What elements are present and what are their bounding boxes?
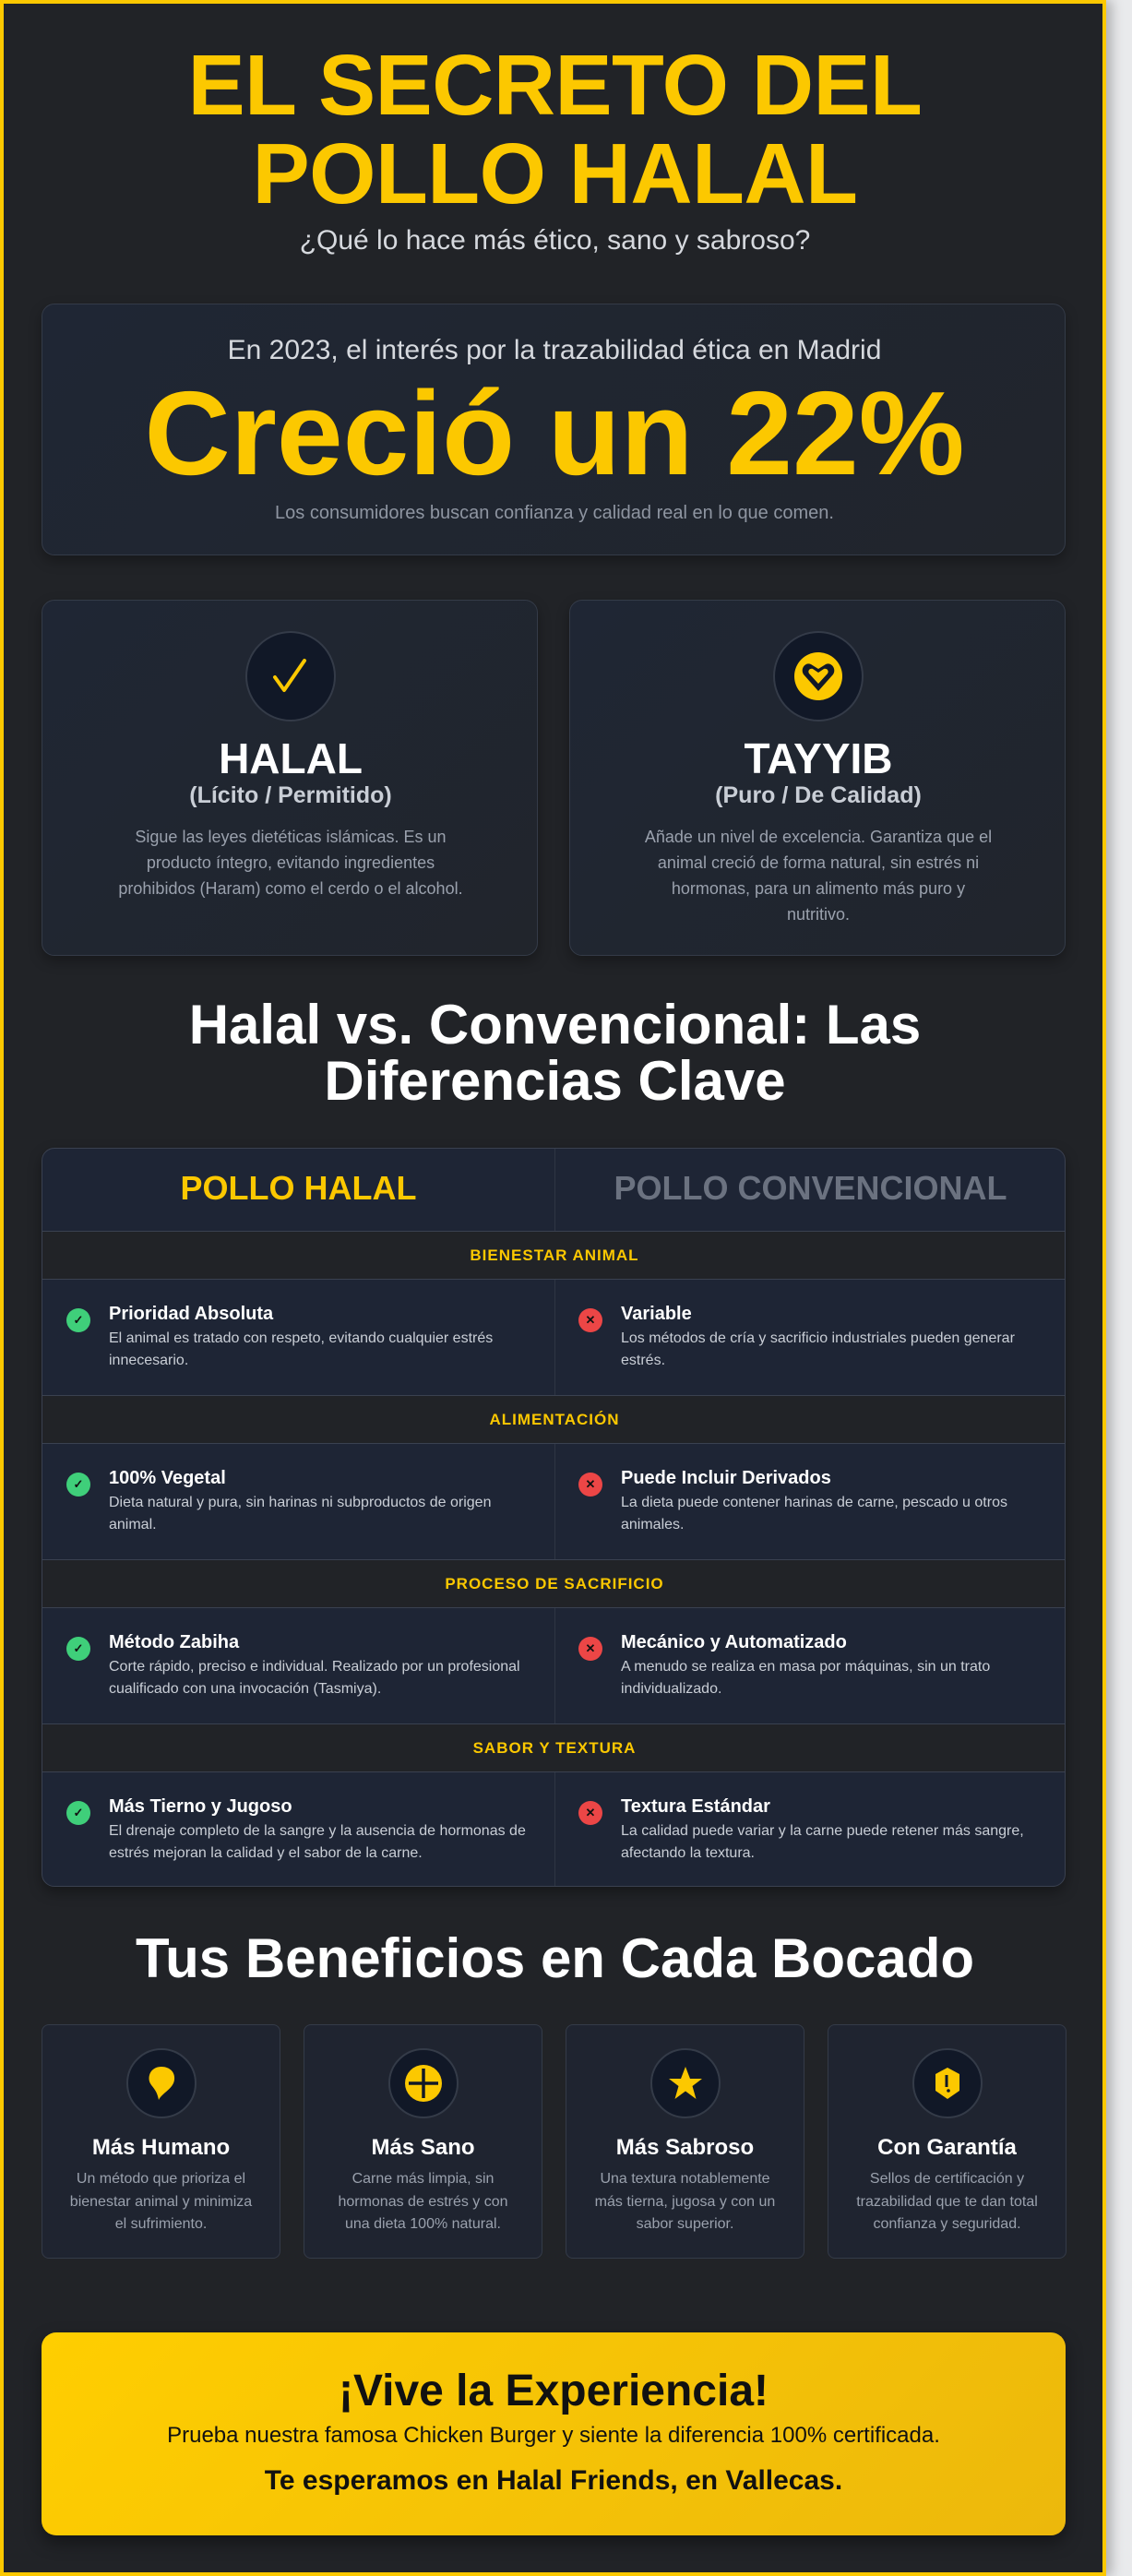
panel: halal	[42, 600, 538, 956]
row: bienestar convencional: Los métodos de cría y sacrificio industriales pueden generar estrés.	[621, 1330, 1015, 1368]
row: alimentacion halal: ✓	[74, 1477, 83, 1491]
row: sacrificio halal: Método Zabiha	[109, 1632, 239, 1652]
stat number: Creció un 22%	[145, 367, 964, 500]
row label: sacrificio: PROCESO DE SACRIFICIO	[445, 1575, 664, 1592]
row: sacrificio convencional: Mecánico y Automatizado	[621, 1632, 847, 1652]
CTA text: Prueba nuestra famosa Chicken Burger y siente la diferencia 100% certificada.	[167, 2423, 940, 2448]
panel: tayyib	[569, 600, 1066, 956]
CTA location: Te esperamos en Halal Friends, en Vallecas.	[265, 2465, 842, 2496]
icon: plus	[388, 2048, 459, 2118]
row: sabor convencional: ✕	[586, 1806, 595, 1819]
row: bienestar convencional	[578, 1304, 1015, 1368]
benefit: sabroso	[566, 2024, 804, 2259]
row: alimentacion convencional: Puede Incluir Derivados	[621, 1468, 831, 1488]
row: sabor halal: Más Tierno y Jugoso	[109, 1796, 292, 1817]
row: sacrificio halal: Corte rápido, preciso e individual. Realizado por un profesional cualificado con una invocación (Tasmiya).	[109, 1659, 520, 1697]
callout: CTA	[42, 2332, 1066, 2535]
heading: benefits: Tus Beneficios en Cada Bocado	[136, 1927, 974, 1989]
row: sabor halal: ✓	[74, 1806, 83, 1819]
benefit: garantia: Sellos de certificación y trazabilidad que te dan total confianza y seguridad.	[856, 2171, 1038, 2232]
icon: heart badge	[773, 631, 864, 722]
panel: stat callout	[42, 304, 1066, 555]
description: Sigue las leyes dietéticas islámicas. Es un producto íntegro, evitando ingredientes prohibidos (Haram) como el cerdo o el alcohol.	[118, 828, 463, 898]
row: sabor convencional: Textura Estándar	[621, 1796, 770, 1817]
row label: bienestar	[42, 1231, 1066, 1280]
row: alimentacion convencional	[578, 1468, 1007, 1532]
subheading: (Puro / De Calidad)	[715, 782, 922, 808]
row label: sacrificio	[42, 1559, 1066, 1608]
benefit: garantia	[828, 2024, 1066, 2259]
row: bienestar halal	[66, 1304, 493, 1368]
benefit: sano	[304, 2024, 542, 2259]
icon: drop	[126, 2048, 197, 2118]
row: bienestar halal: ✓	[74, 1313, 83, 1327]
comparison table	[42, 1148, 1066, 1887]
row label: alimentacion	[42, 1395, 1066, 1444]
row: alimentacion convencional: ✕	[586, 1477, 595, 1491]
row: bienestar halal: Prioridad Absoluta	[109, 1304, 273, 1324]
title: POLLO HALAL	[253, 125, 857, 221]
heading: halal: HALAL	[219, 734, 363, 782]
row: sacrificio convencional: A menudo se realiza en masa por máquinas, sin un trato individualizado.	[621, 1659, 990, 1697]
row: sabor halal	[66, 1796, 526, 1861]
subtitle: ¿Qué lo hace más ético, sano y sabroso?	[300, 225, 810, 256]
benefit: sabroso: Más Sabroso	[616, 2135, 754, 2160]
row: bienestar convencional: ✕	[586, 1313, 595, 1327]
row label: sabor: SABOR Y TEXTURA	[473, 1739, 636, 1757]
icon: check	[245, 631, 336, 722]
benefit: sabroso: Una textura notablemente más tierna, jugosa y con un sabor superior.	[595, 2171, 775, 2232]
heading: comparison	[189, 994, 921, 1112]
row label: alimentacion: ALIMENTACIÓN	[489, 1411, 620, 1428]
row: alimentacion halal: Dieta natural y pura, sin harinas ni subproductos de origen animal.	[109, 1495, 491, 1532]
benefit: sano: Carne más limpia, sin hormonas de estrés y con una dieta 100% natural.	[338, 2171, 508, 2232]
benefit: sano: Más Sano	[371, 2135, 475, 2160]
subheading: (Lícito / Permitido)	[189, 782, 392, 808]
row: sabor convencional	[578, 1796, 1024, 1861]
heading: tayyib: TAYYIB	[744, 734, 893, 782]
row: sacrificio convencional: ✕	[586, 1641, 595, 1655]
heading: comparison: Halal vs. Convencional: Las	[189, 994, 921, 1055]
row: bienestar convencional: Variable	[621, 1304, 692, 1324]
row: alimentacion halal	[66, 1468, 491, 1532]
row: alimentacion convencional: La dieta puede contener harinas de carne, pescado u otros animales.	[621, 1495, 1007, 1532]
description: Añade un nivel de excelencia. Garantiza que el animal creció de forma natural, sin estrés ni hormonas, para un alimento más puro y nutritivo.	[645, 828, 992, 924]
heading: comparison: Diferencias Clave	[324, 1050, 786, 1112]
title	[188, 37, 922, 221]
benefit: humano	[42, 2024, 280, 2259]
row: sacrificio halal	[66, 1632, 520, 1697]
row: sabor halal: El drenaje completo de la sangre y la ausencia de hormonas de estrés mejoran la calidad y el sabor de la carne.	[109, 1823, 526, 1861]
row: sabor convencional: La calidad puede variar y la carne puede retener más sangre, afectando la textura.	[621, 1823, 1024, 1861]
row: alimentacion halal: 100% Vegetal	[109, 1468, 226, 1488]
benefit: garantia: Con Garantía	[877, 2135, 1017, 2160]
row: bienestar halal: El animal es tratado con respeto, evitando cualquier estrés innecesario.	[109, 1330, 493, 1368]
benefit: humano: Un método que prioriza el bienestar animal y minimiza el sufrimiento.	[70, 2171, 252, 2232]
column header: convencional: POLLO CONVENCIONAL	[614, 1169, 1007, 1207]
benefit: humano: Más Humano	[92, 2135, 230, 2160]
icon: shield	[912, 2048, 983, 2118]
row label: bienestar: BIENESTAR ANIMAL	[470, 1246, 639, 1264]
row: sacrificio convencional	[578, 1632, 990, 1697]
icon: star	[650, 2048, 721, 2118]
row: sacrificio halal: ✓	[74, 1641, 83, 1655]
title: EL SECRETO DEL	[188, 37, 922, 133]
CTA title: ¡Vive la Experiencia!	[339, 2367, 769, 2415]
stat intro: En 2023, el interés por la trazabilidad ética en Madrid	[228, 335, 881, 365]
column header: halal: POLLO HALAL	[181, 1169, 416, 1207]
stat note: Los consumidores buscan confianza y calidad real en lo que comen.	[275, 503, 834, 523]
row label: sabor	[42, 1723, 1066, 1772]
